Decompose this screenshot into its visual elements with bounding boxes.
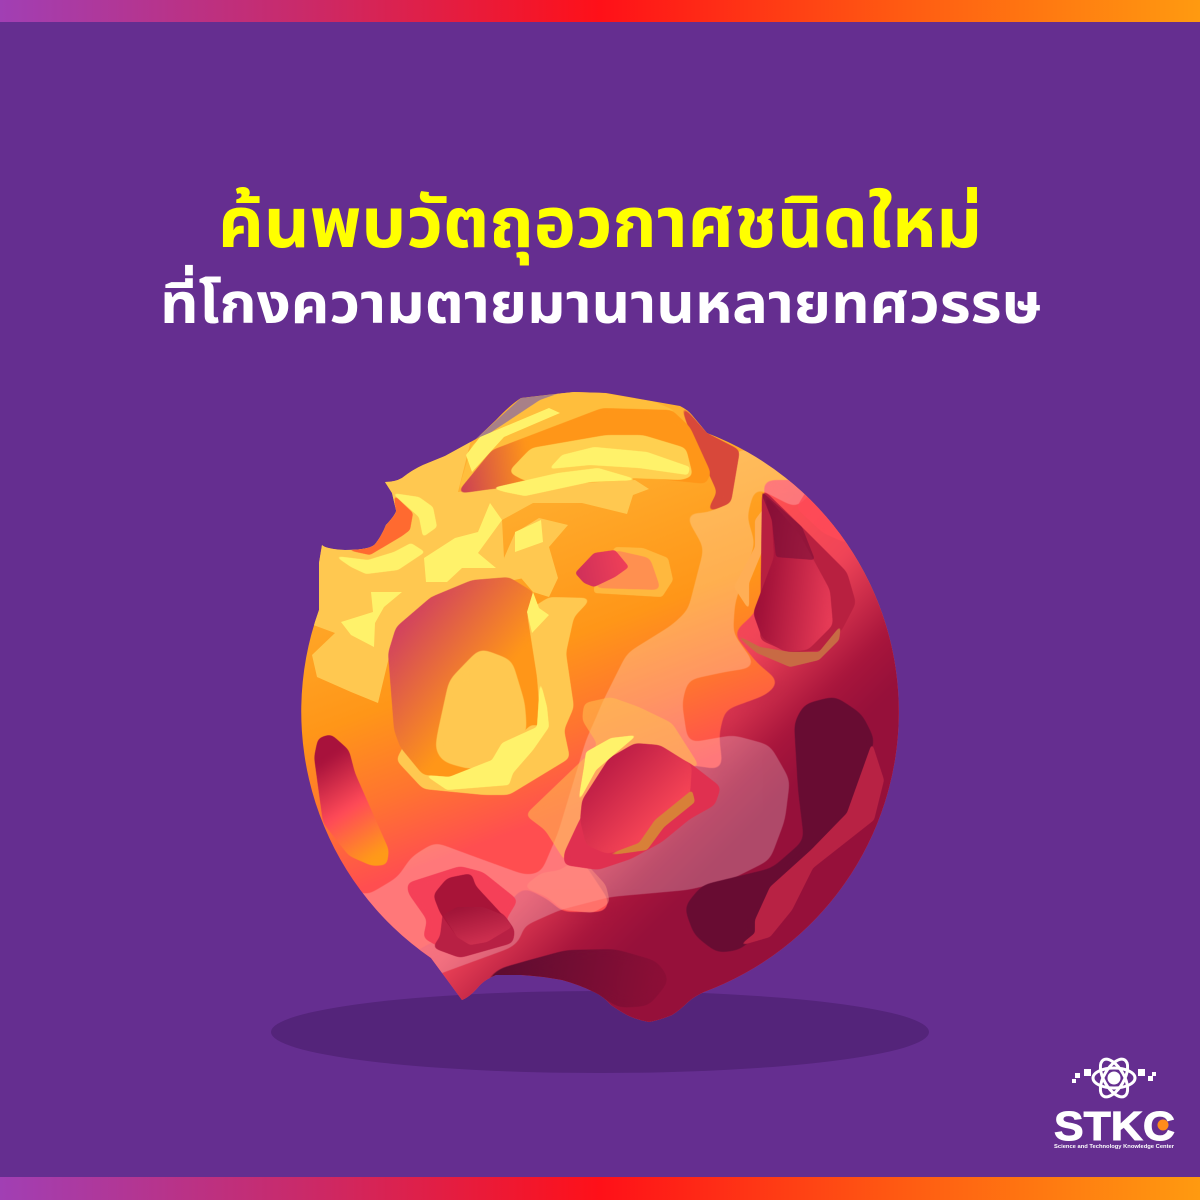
yellow patch: central crater bottom (425, 680, 549, 790)
lower crater inner gradient (443, 907, 512, 945)
logo caption: Science and Technology Knowledge Center (1054, 1144, 1175, 1150)
planet base (290, 380, 910, 1030)
lower-right lighter band (739, 743, 884, 946)
lower crater shadow lip (434, 912, 514, 958)
yellow left patch (341, 592, 402, 647)
yellow streak top (466, 408, 560, 472)
yellow arc on crater (578, 735, 637, 803)
light orange slip (738, 511, 762, 607)
yellow band below crater (492, 468, 639, 496)
yellow near notch (395, 494, 437, 536)
top crater yellow (549, 447, 690, 475)
lower crater (433, 873, 512, 945)
central crater inner glow (435, 648, 527, 770)
central crater (388, 577, 541, 777)
yellow left band (335, 543, 425, 574)
illustration: planet (301, 392, 899, 1022)
title line 2: ที่โกงความตายมานานหลายทศวรรษ (160, 264, 1042, 335)
small crater (575, 550, 629, 587)
logo atom icon (1093, 1055, 1135, 1101)
small crater surround (594, 547, 673, 597)
translucent pale swirl (525, 697, 702, 863)
top crater inner glow (508, 435, 693, 481)
crimson shaded side (420, 480, 899, 1022)
logo wordmark: STKC (1054, 1103, 1175, 1149)
central-right crater lip (564, 745, 721, 870)
title (160, 184, 1042, 335)
orange sliver under right crater (740, 628, 840, 667)
orange sliver on crater (604, 790, 695, 856)
top band (460, 392, 672, 487)
lower-right dark crater (684, 696, 875, 953)
central-right crater (580, 743, 692, 854)
red rim by right crater (798, 494, 846, 542)
lower crater lip (408, 866, 516, 945)
top crater (456, 408, 711, 494)
ridge at top right (683, 410, 740, 510)
right crater dark tip (760, 490, 815, 560)
left crater (314, 734, 389, 866)
yellow patch: crater top (527, 592, 549, 633)
right crater lip (760, 488, 856, 653)
logo pixel dots (1072, 1069, 1156, 1083)
center upper patch (504, 518, 568, 597)
title line 1: ค้นพบวัตถุอวกาศชนิดใหม่ (218, 184, 982, 265)
pale upper-left terrain (312, 442, 649, 703)
top mauve rim (476, 394, 557, 439)
notch orange (347, 495, 413, 555)
salmon highlight band (362, 450, 807, 973)
yellow diamond patch (515, 520, 543, 552)
right crater (753, 488, 833, 652)
logo orange dot (1158, 1120, 1168, 1130)
yellow star patch (424, 503, 502, 582)
bottom dark crater (470, 949, 670, 1008)
band around central crater (396, 597, 592, 795)
salmon blob over crimson (528, 866, 609, 913)
logo: STKC (1054, 1055, 1175, 1150)
planet shadow (271, 991, 929, 1073)
small crater inner (594, 550, 661, 590)
top gradient bar (0, 0, 1200, 22)
bottom gradient bar (0, 1177, 1200, 1200)
